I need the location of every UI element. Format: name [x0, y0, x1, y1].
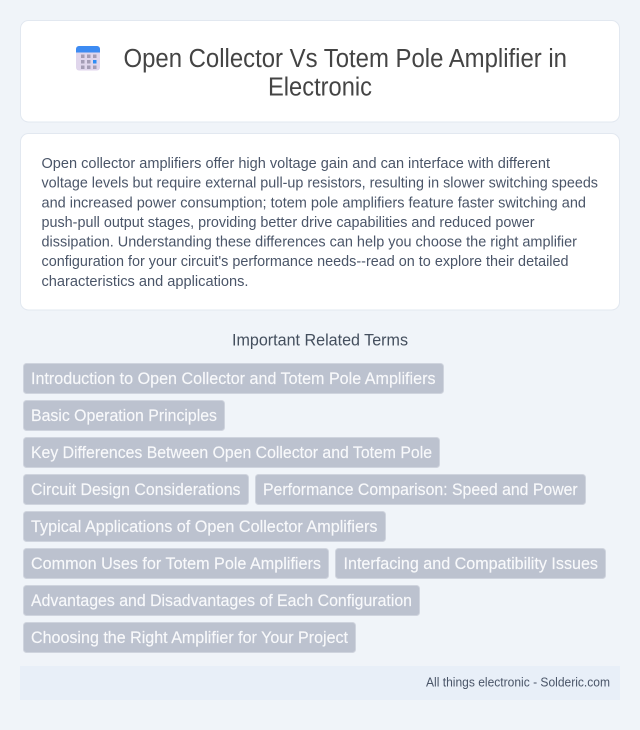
panel: summary card [20, 134, 620, 310]
tag: interfacing: Interfacing and Compatibility Issues [344, 555, 598, 573]
tag: choosing [24, 622, 356, 652]
tag: performance comparison: Performance Comparison: Speed and Power [263, 481, 578, 499]
title [124, 45, 567, 102]
icon: calendar grid [76, 46, 100, 70]
tag: performance comparison [256, 474, 586, 504]
tag: advantages: Advantages and Disadvantages of Each Configuration [31, 592, 412, 610]
text block: summary paragraph [42, 156, 598, 290]
text block: summary paragraph: configuration for your circuit's performance needs--read on to explore their detailed [42, 254, 568, 270]
tag: common uses: Common Uses for Totem Pole Amplifiers [31, 555, 321, 573]
tag: common uses [24, 548, 328, 578]
tag: choosing: Choosing the Right Amplifier for Your Project [31, 629, 348, 647]
tag: typical applications: Typical Applications of Open Collector Amplifiers [31, 518, 378, 536]
tag: circuit design: Circuit Design Considerations [31, 481, 240, 499]
tag: interfacing [336, 548, 606, 578]
text block: summary paragraph: push-pull output stages, providing better drive capabilities and reduced power [42, 215, 535, 231]
panel: title card [20, 20, 620, 122]
text block: summary paragraph: and increased power consumption; totem pole amplifiers feature faster switching and [42, 195, 586, 211]
tag: typical applications [24, 512, 386, 542]
title: Electronic [268, 74, 372, 102]
tag: introduction [24, 364, 444, 394]
tag: key differences: Key Differences Between Open Collector and Totem Pole [31, 444, 432, 462]
footer: All things electronic - Solderic.com [426, 676, 610, 690]
tag: advantages [24, 586, 420, 616]
tag list: related terms [24, 364, 606, 652]
tag: key differences [24, 438, 440, 468]
tag: circuit design [24, 474, 248, 504]
text block: summary paragraph: voltage levels but require external pull-up resistors, resulting in slower switching speeds [42, 176, 598, 192]
text block: summary paragraph: Open collector amplifiers offer high voltage gain and can interface with different [42, 156, 550, 172]
tag: introduction: Introduction to Open Collector and Totem Pole Amplifiers [31, 370, 436, 388]
tag: basic operation [24, 400, 224, 430]
title: Open Collector Vs Totem Pole Amplifier in [124, 45, 567, 73]
text block: summary paragraph: dissipation. Understanding these differences can help you choose the right amplifier [42, 235, 577, 251]
footer [20, 666, 620, 700]
text block: summary paragraph: characteristics and applications. [42, 274, 249, 290]
tag: basic operation: Basic Operation Principles [31, 407, 217, 425]
heading: important related terms: Important Related Terms [232, 332, 408, 350]
